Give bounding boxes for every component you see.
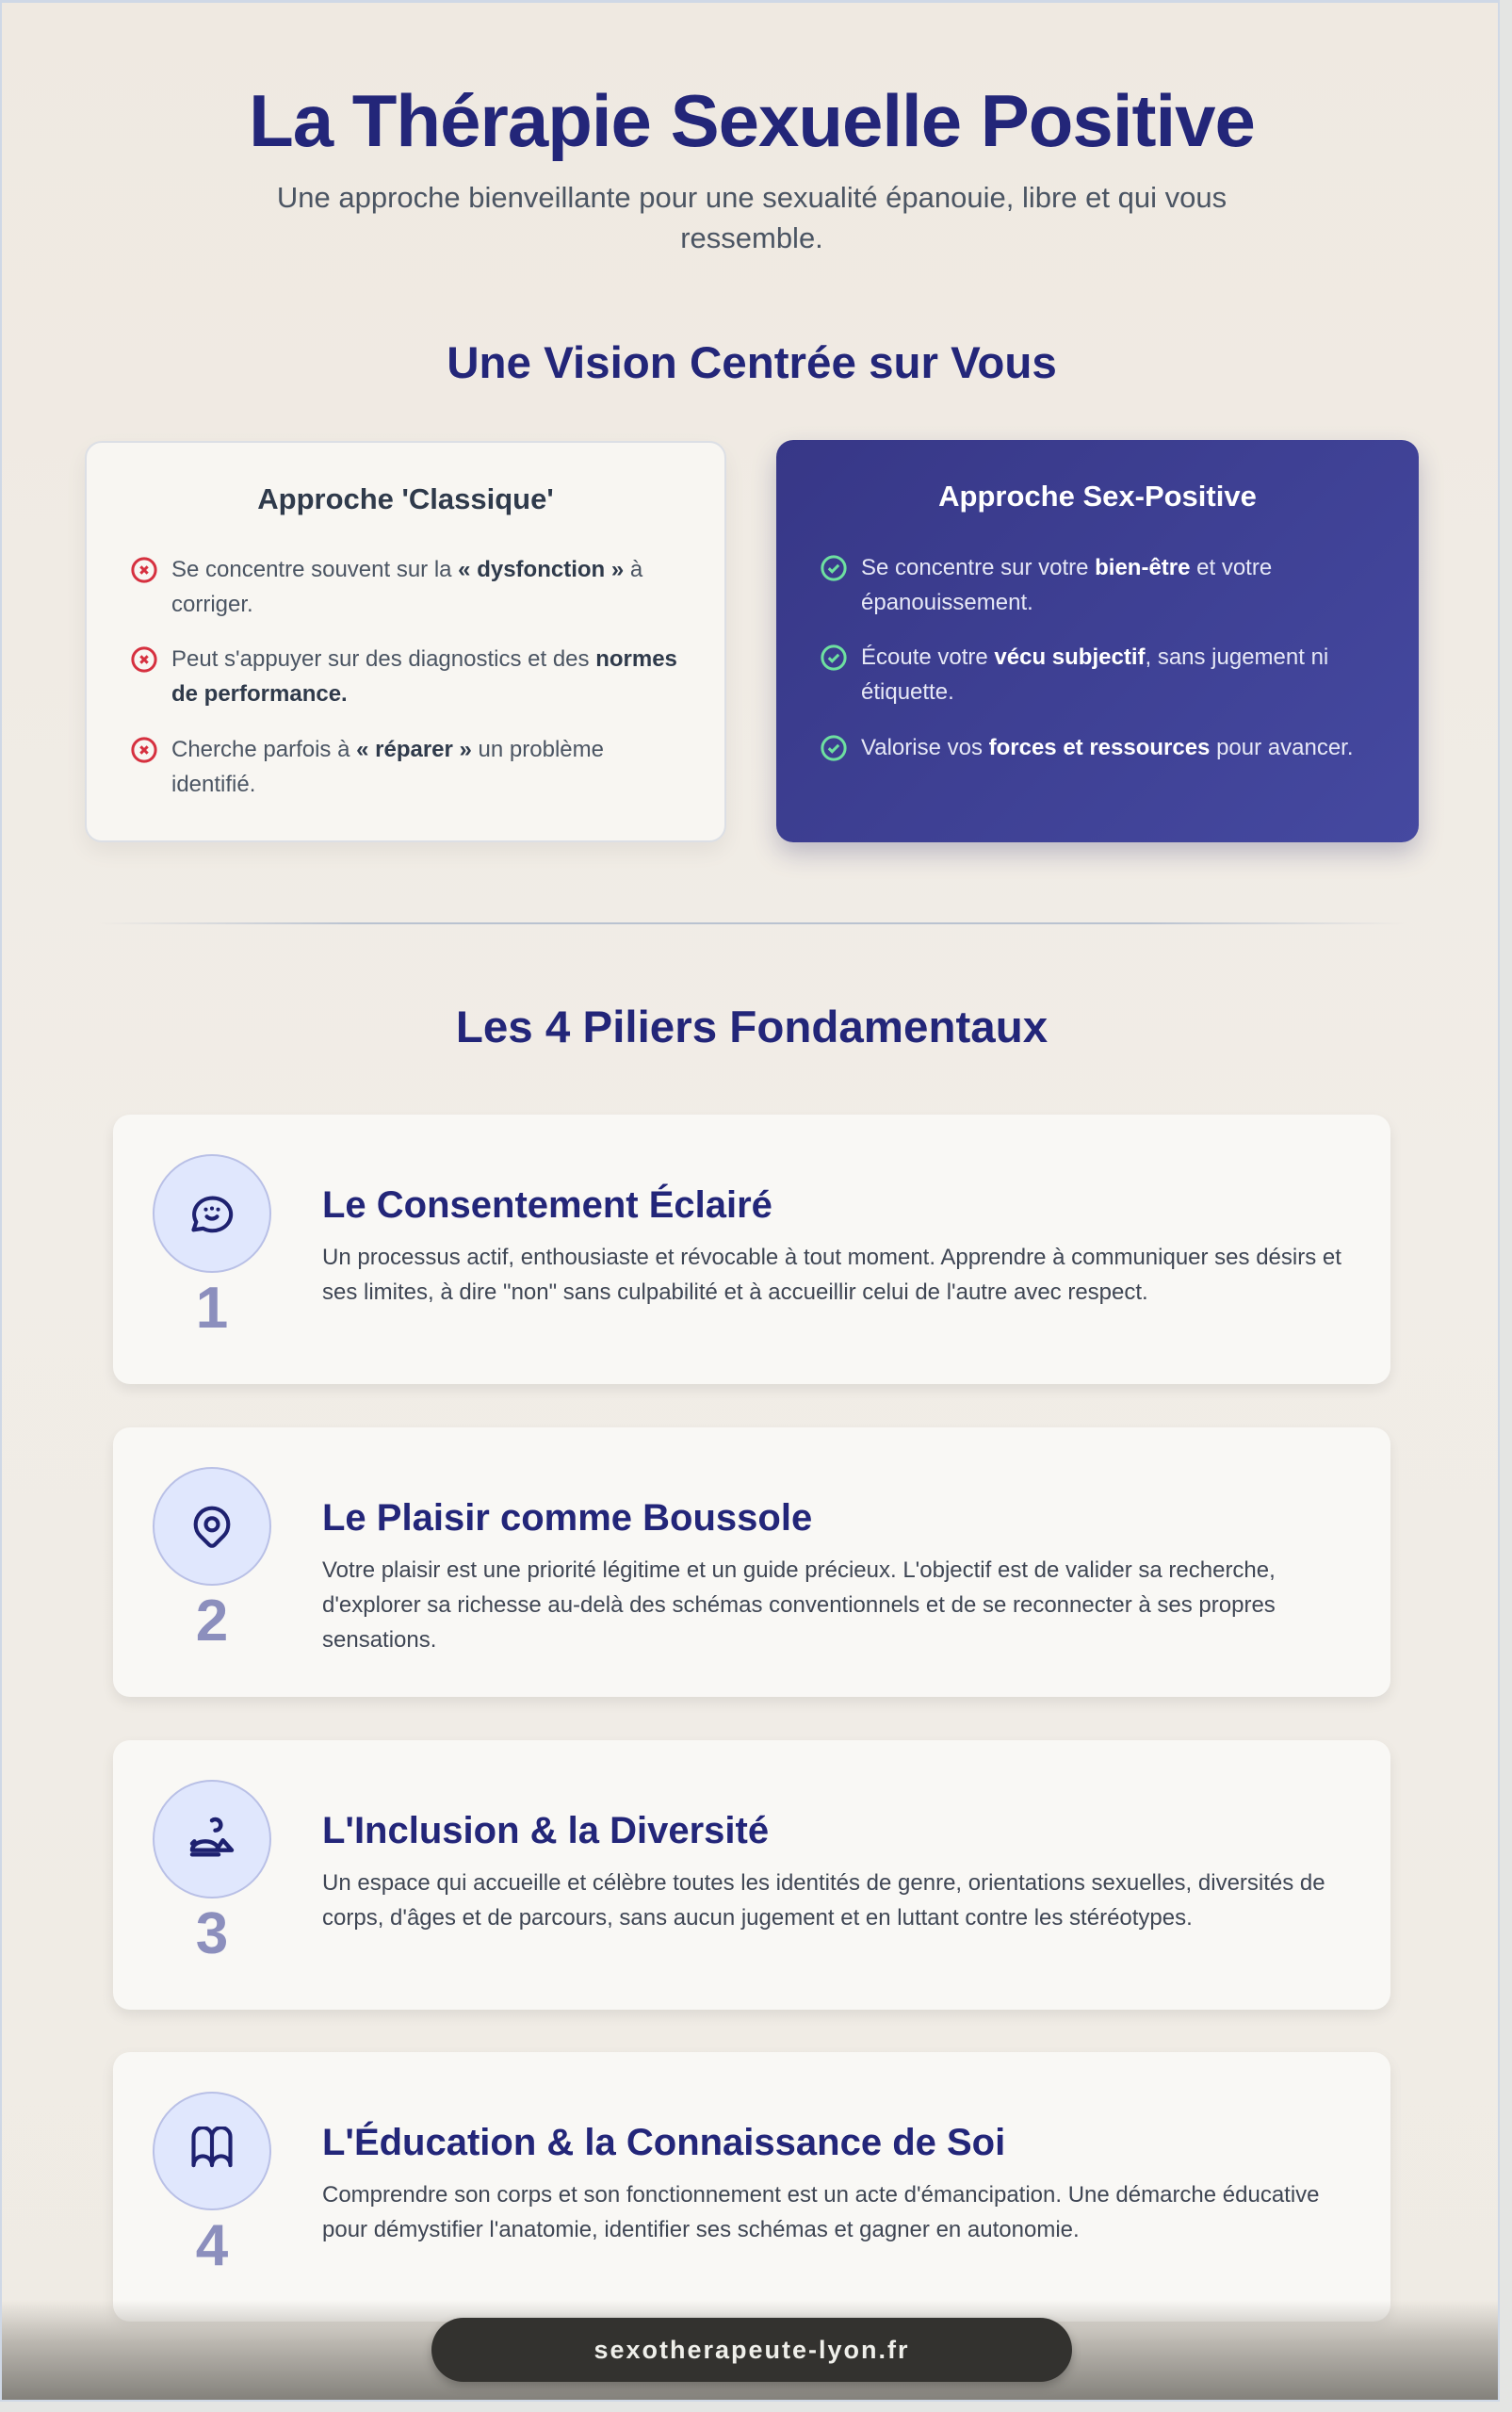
item 2: Écoute votre vécu subjectif, sans jugement ni étiquette. (861, 644, 1328, 705)
pillar 2 (113, 1427, 1390, 1697)
pillar 3 (113, 1740, 1390, 2010)
pillar 3 title: L'Inclusion & la Diversité (322, 1810, 769, 1851)
item 1: Se concentre souvent sur la « dysfonction » à corriger. (171, 557, 642, 617)
pillar 4 title: L'Éducation & la Connaissance de Soi (322, 2122, 1005, 2163)
panel: sex-positive (776, 440, 1419, 842)
footer: url pill: sexotherapeute-lyon.fr (593, 2336, 910, 2364)
pillar 1 (113, 1115, 1390, 1384)
heading: classique: Approche 'Classique' (257, 482, 554, 515)
number 2: 2 (196, 1589, 228, 1654)
pillar 1 text: Un processus actif, enthousiaste et révocable à tout moment. Apprendre à communiquer ses désirs et ses limites, à dire "non" sans culpabilité et à accueillir celui de l'autre avec respect. (322, 1245, 1341, 1305)
heading: vision: Une Vision Centrée sur Vous (447, 338, 1057, 388)
icon: chat (153, 1154, 271, 1273)
pillar 4 (113, 2052, 1390, 2322)
pillar 4 text: Comprendre son corps et son fonctionnement est un acte d'émancipation. Une démarche éducative pour démystifier l'anatomie, identifier ses schémas et gagner en autonomie. (322, 2182, 1320, 2242)
icon: location (153, 1467, 271, 1586)
footer: url pill (431, 2318, 1072, 2382)
icon: book (153, 2092, 271, 2210)
subtitle: Une approche bienveillante pour une sexualité épanouie, libre et qui vous ressemble. (277, 181, 1227, 254)
item 3: Valorise vos forces et ressources pour avancer. (861, 735, 1354, 760)
title: La Thérapie Sexuelle Positive (249, 79, 1255, 162)
panel: classique (85, 441, 726, 842)
number 1: 1 (196, 1276, 228, 1341)
pillar 3 text: Un espace qui accueille et célèbre toutes les identités de genre, orientations sexuelles, diversités de corps, d'âges et de parcours, sans aucun jugement et en luttant contre les stéréotypes. (322, 1870, 1325, 1931)
pillar 2 title: Le Plaisir comme Boussole (322, 1497, 812, 1539)
number 3: 3 (196, 1901, 228, 1966)
item 3: Cherche parfois à « réparer » un problème identifié. (171, 737, 604, 797)
item 2: Peut s'appuyer sur des diagnostics et des normes de performance. (171, 646, 677, 707)
icon: diversity (153, 1780, 271, 1899)
item 1: Se concentre sur votre bien-être et votre épanouissement. (861, 555, 1272, 615)
pillar 1 title: Le Consentement Éclairé (322, 1184, 772, 1226)
pillar 2 text: Votre plaisir est une priorité légitime et un guide précieux. L'objectif est de valider sa recherche, d'explorer sa richesse au-delà des schémas conventionnels et de se reconnecter à ses propres sensations. (322, 1557, 1276, 1653)
number 4: 4 (196, 2213, 228, 2278)
heading: piliers: Les 4 Piliers Fondamentaux (456, 1002, 1048, 1052)
heading: sex-positive: Approche Sex-Positive (938, 480, 1257, 513)
